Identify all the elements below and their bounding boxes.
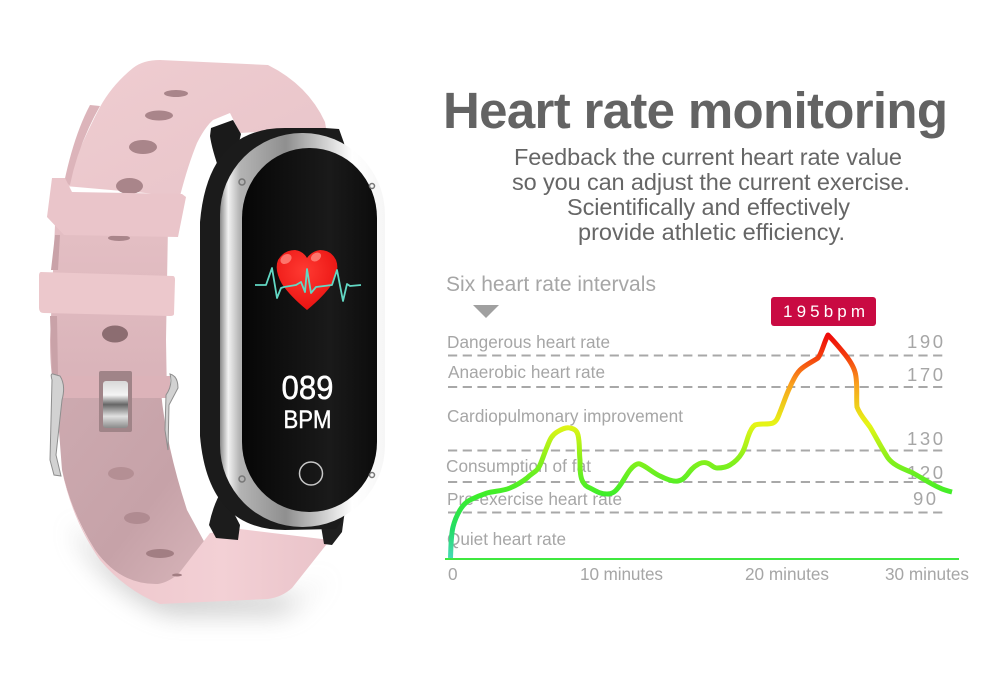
time axis labels: 30 minutes [885, 564, 969, 584]
top left lug [210, 120, 241, 172]
time axis labels: 20 minutes [745, 564, 829, 584]
buckle left frame [50, 374, 64, 476]
buckle keeper [103, 381, 128, 428]
baseline [445, 558, 959, 560]
silver frame [220, 133, 385, 527]
bpm scale numbers: 130 [907, 428, 943, 449]
lower strap outer band [62, 470, 330, 604]
lower strap inner side [56, 392, 206, 586]
strap shadow [72, 525, 330, 612]
bpm scale numbers: 170 [907, 364, 943, 385]
strap loop 1 [47, 178, 186, 237]
heart rate reading: 089 [282, 369, 334, 406]
strap holes [102, 90, 188, 576]
heart rate curve [450, 335, 952, 558]
icon: heart [277, 250, 337, 310]
interval labels: Quiet heart rate [447, 529, 566, 549]
BPM label: BPM [284, 406, 332, 434]
bpm scale numbers: 120 [907, 462, 943, 483]
strap side shade [50, 235, 60, 375]
time axis labels [448, 564, 969, 584]
screen [242, 148, 377, 512]
interval labels: Dangerous heart rate [447, 332, 610, 352]
strap loop 2 [39, 272, 175, 316]
buckle keeper slot [99, 371, 132, 432]
bottom right lug [320, 517, 344, 545]
bpm scale numbers [907, 331, 943, 509]
chart heading: Six heart rate intervals [446, 273, 656, 296]
description text: Feedback the current heart rate value [514, 144, 902, 170]
buckle right frame [165, 374, 178, 450]
bottom left lug [209, 490, 240, 540]
description text: Scientifically and effectively [567, 194, 850, 220]
interval labels: Pre-exercise heart rate [447, 489, 622, 509]
upper strap middle section [50, 225, 168, 398]
description text: so you can adjust the current exercise. [512, 169, 910, 195]
buckle bar [62, 376, 170, 398]
interval labels: Consumption of fat [446, 456, 591, 476]
home button [300, 462, 322, 485]
icon: down triangle [473, 305, 499, 318]
chart: heart rate intervals [445, 297, 969, 584]
time axis labels: 0 [448, 564, 458, 584]
bpm scale numbers: 190 [907, 331, 943, 352]
peak badge: 195bpm [783, 302, 865, 321]
interval labels [446, 332, 683, 549]
interval labels: Anaerobic heart rate [448, 362, 605, 382]
title: Heart rate monitoring [443, 82, 948, 139]
screws [239, 179, 374, 482]
description text: provide athletic efficiency. [578, 219, 845, 245]
upper strap [65, 60, 326, 196]
time axis labels: 10 minutes [580, 564, 663, 584]
watch illustration [39, 60, 385, 612]
strap back shoulder [64, 105, 100, 185]
watch body [200, 128, 350, 530]
icon: ECG line [255, 268, 361, 301]
interval labels: Cardiopulmonary improvement [447, 406, 683, 426]
bpm scale numbers: 90 [913, 488, 936, 509]
description text [512, 144, 910, 245]
peak badge [771, 297, 876, 326]
